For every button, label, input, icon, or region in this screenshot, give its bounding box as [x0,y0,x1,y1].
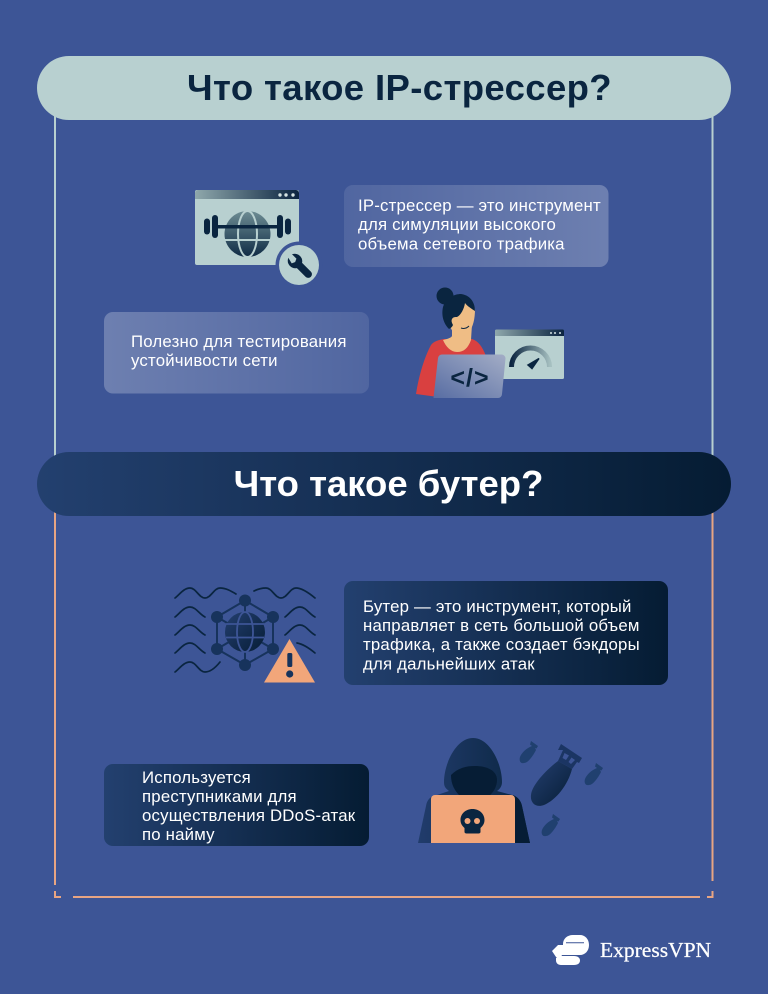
text box: booter definition [344,581,668,685]
text box: stresser definition: IP-стрессер — это инструмент [358,196,601,215]
icon: gauge window [495,330,564,379]
text box: useful for testing: Полезно для тестирования [131,332,347,351]
icon: laptop screen with skull [431,795,515,843]
waves [175,588,315,672]
text box: booter definition: Бутер — это инструмент, который [363,597,632,616]
heading: what is an IP stresser: Что такое IP-стрессер? [187,67,612,108]
figure: woman [416,288,486,397]
text box: booter definition: направляет в сеть большой объем [363,616,640,635]
icon: laptop with code symbol: </> [450,364,490,392]
network hexagon [217,600,273,665]
text box: criminals use: осуществления DDoS-атак [142,806,356,825]
heading: what is a booter [37,452,731,516]
illustration: woman with laptop and speed gauge [416,288,564,398]
frame: booter section [55,512,712,897]
text box: stresser definition: объема сетевого трафика [358,234,565,254]
text box: stresser definition: для симуляции высокого [358,215,556,234]
logo: ExpressVPN [552,935,712,965]
figure: hooded hacker [418,738,530,843]
icon: warning triangle [264,639,315,682]
heading: what is an IP stresser [37,56,731,120]
icon: ExpressVPN mark [552,935,589,965]
text box: useful for testing [104,312,369,394]
icon: browser window with barbell globe and wrench [195,190,322,288]
heading: what is a booter: Что такое бутер? [234,463,543,504]
frame: IP-stresser section [55,115,712,456]
text box: criminals use: Используется [142,768,251,787]
text box: criminals use: преступниками для [142,787,297,806]
text box: criminals use: по найму [142,825,215,844]
text box: criminals use [104,764,369,846]
text box: booter definition: для дальнейших атак [363,654,535,674]
text box: booter definition: трафика, а также создает бэкдоры [363,635,640,654]
icon: network globe with waves and warning [175,588,315,682]
text box: useful for testing: устойчивости сети [131,351,278,370]
logo: ExpressVPN: ExpressVPN [600,938,712,962]
icon: large bomb [531,744,582,806]
text box: stresser definition [344,185,608,267]
icon: small bombs [520,741,603,836]
illustration: hooded hacker with laptop and bombs [418,738,603,843]
icon: laptop with code symbol [434,354,506,398]
